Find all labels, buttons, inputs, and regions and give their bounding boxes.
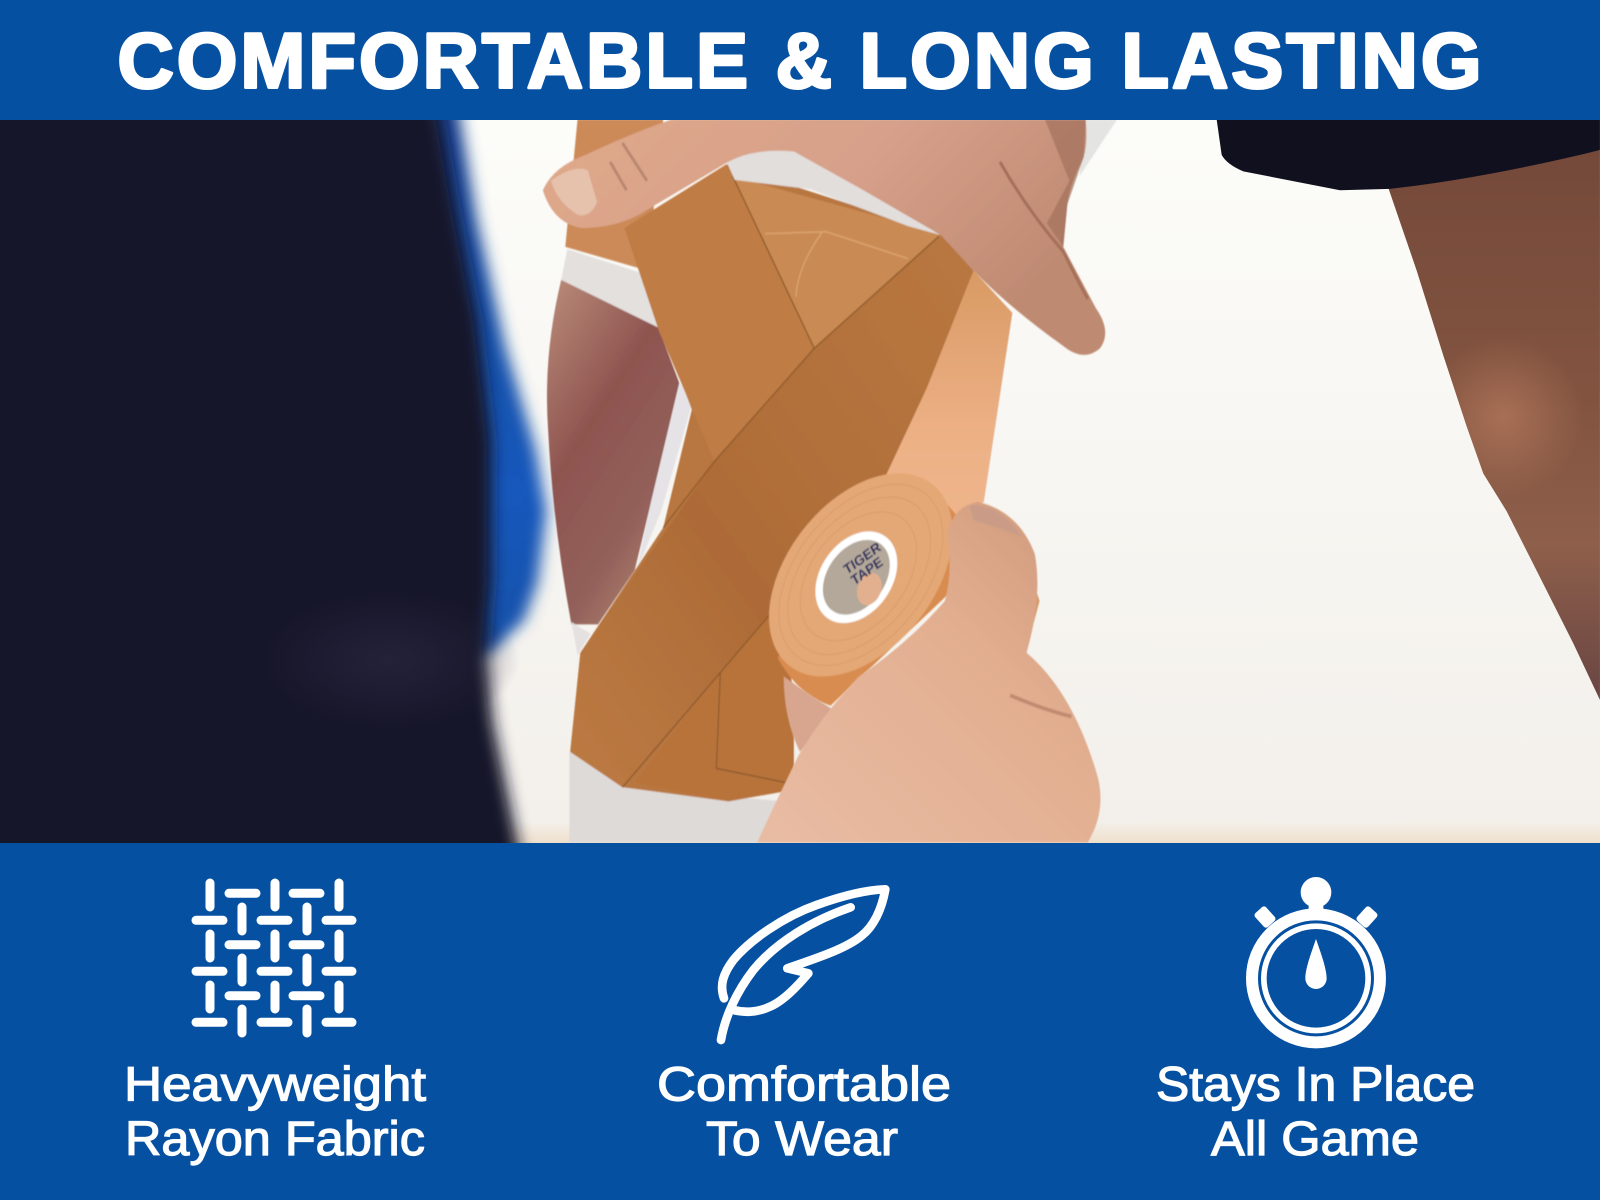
roll core inside [810, 525, 903, 630]
roll core white ring [800, 513, 913, 642]
hand knuckle crease [610, 143, 647, 190]
underwrap upper left [561, 249, 659, 328]
label: heavyweight rayon fabric: Heavyweight [124, 1059, 426, 1112]
top tan tape behind fingers [565, 119, 663, 270]
label: heavyweight rayon fabric: Rayon Fabric [125, 1113, 425, 1166]
bare knee skin [547, 280, 680, 624]
label: heavyweight rayon fabric [124, 1059, 426, 1166]
bottom panel [0, 843, 1600, 1200]
roll brand text: TIGER [841, 538, 883, 577]
label: stays in place all game: All Game [1211, 1113, 1419, 1166]
peach stretched tape [886, 270, 1012, 535]
tape lower panel [635, 601, 794, 801]
icon: feather [721, 889, 885, 1040]
label: comfortable to wear [657, 1059, 951, 1166]
palm crease [1010, 695, 1071, 716]
bare right leg [1388, 150, 1600, 700]
roll core peach spot [852, 568, 887, 610]
label: stays in place all game [1156, 1059, 1475, 1166]
thumbnail [551, 169, 597, 215]
white strip right of hand [1080, 119, 1117, 176]
taped knee and hands [543, 119, 1117, 842]
icon: stopwatch [1252, 877, 1380, 1042]
wall background [0, 120, 1600, 843]
label: comfortable to wear: To Wear [706, 1113, 898, 1166]
tape vertical panel [624, 164, 814, 462]
underwrap middle strip [637, 381, 692, 570]
navy soft highlight [260, 590, 520, 730]
thumbnail lower [969, 505, 1022, 537]
upper white wrap [727, 150, 941, 235]
leg highlight [1452, 353, 1565, 478]
photo: knee being taped [0, 82, 1600, 884]
underwrap bottom [569, 752, 786, 842]
title: COMFORTABLE & LONG LASTING [118, 16, 1482, 104]
roll sliver right [1018, 587, 1040, 657]
tape diagonal band [570, 236, 973, 787]
dark shorts [1217, 119, 1600, 190]
roll rings [749, 449, 973, 701]
tape roll face [735, 433, 986, 717]
band seam lines [622, 176, 939, 787]
lower hand [757, 502, 1101, 842]
underwrap small lower [571, 622, 591, 655]
hand finger shadow [1045, 119, 1086, 247]
tape upper right panel [733, 176, 941, 348]
finger under roll [784, 676, 833, 752]
roll brand text: TAPE [848, 553, 885, 588]
label: stays in place all game: Stays In Place [1156, 1059, 1475, 1112]
header band [0, 0, 1600, 120]
icon: woven fabric [196, 883, 352, 1033]
blurred blue sleeve [421, 91, 546, 662]
label: comfortable to wear: Comfortable [657, 1059, 951, 1112]
tape fine edge lines [765, 232, 908, 296]
tape roll side [778, 488, 961, 706]
finger crease [1000, 162, 1088, 299]
blurred navy shoulder [0, 82, 526, 884]
upper hand [543, 119, 1105, 355]
tape underlay [570, 164, 1012, 801]
